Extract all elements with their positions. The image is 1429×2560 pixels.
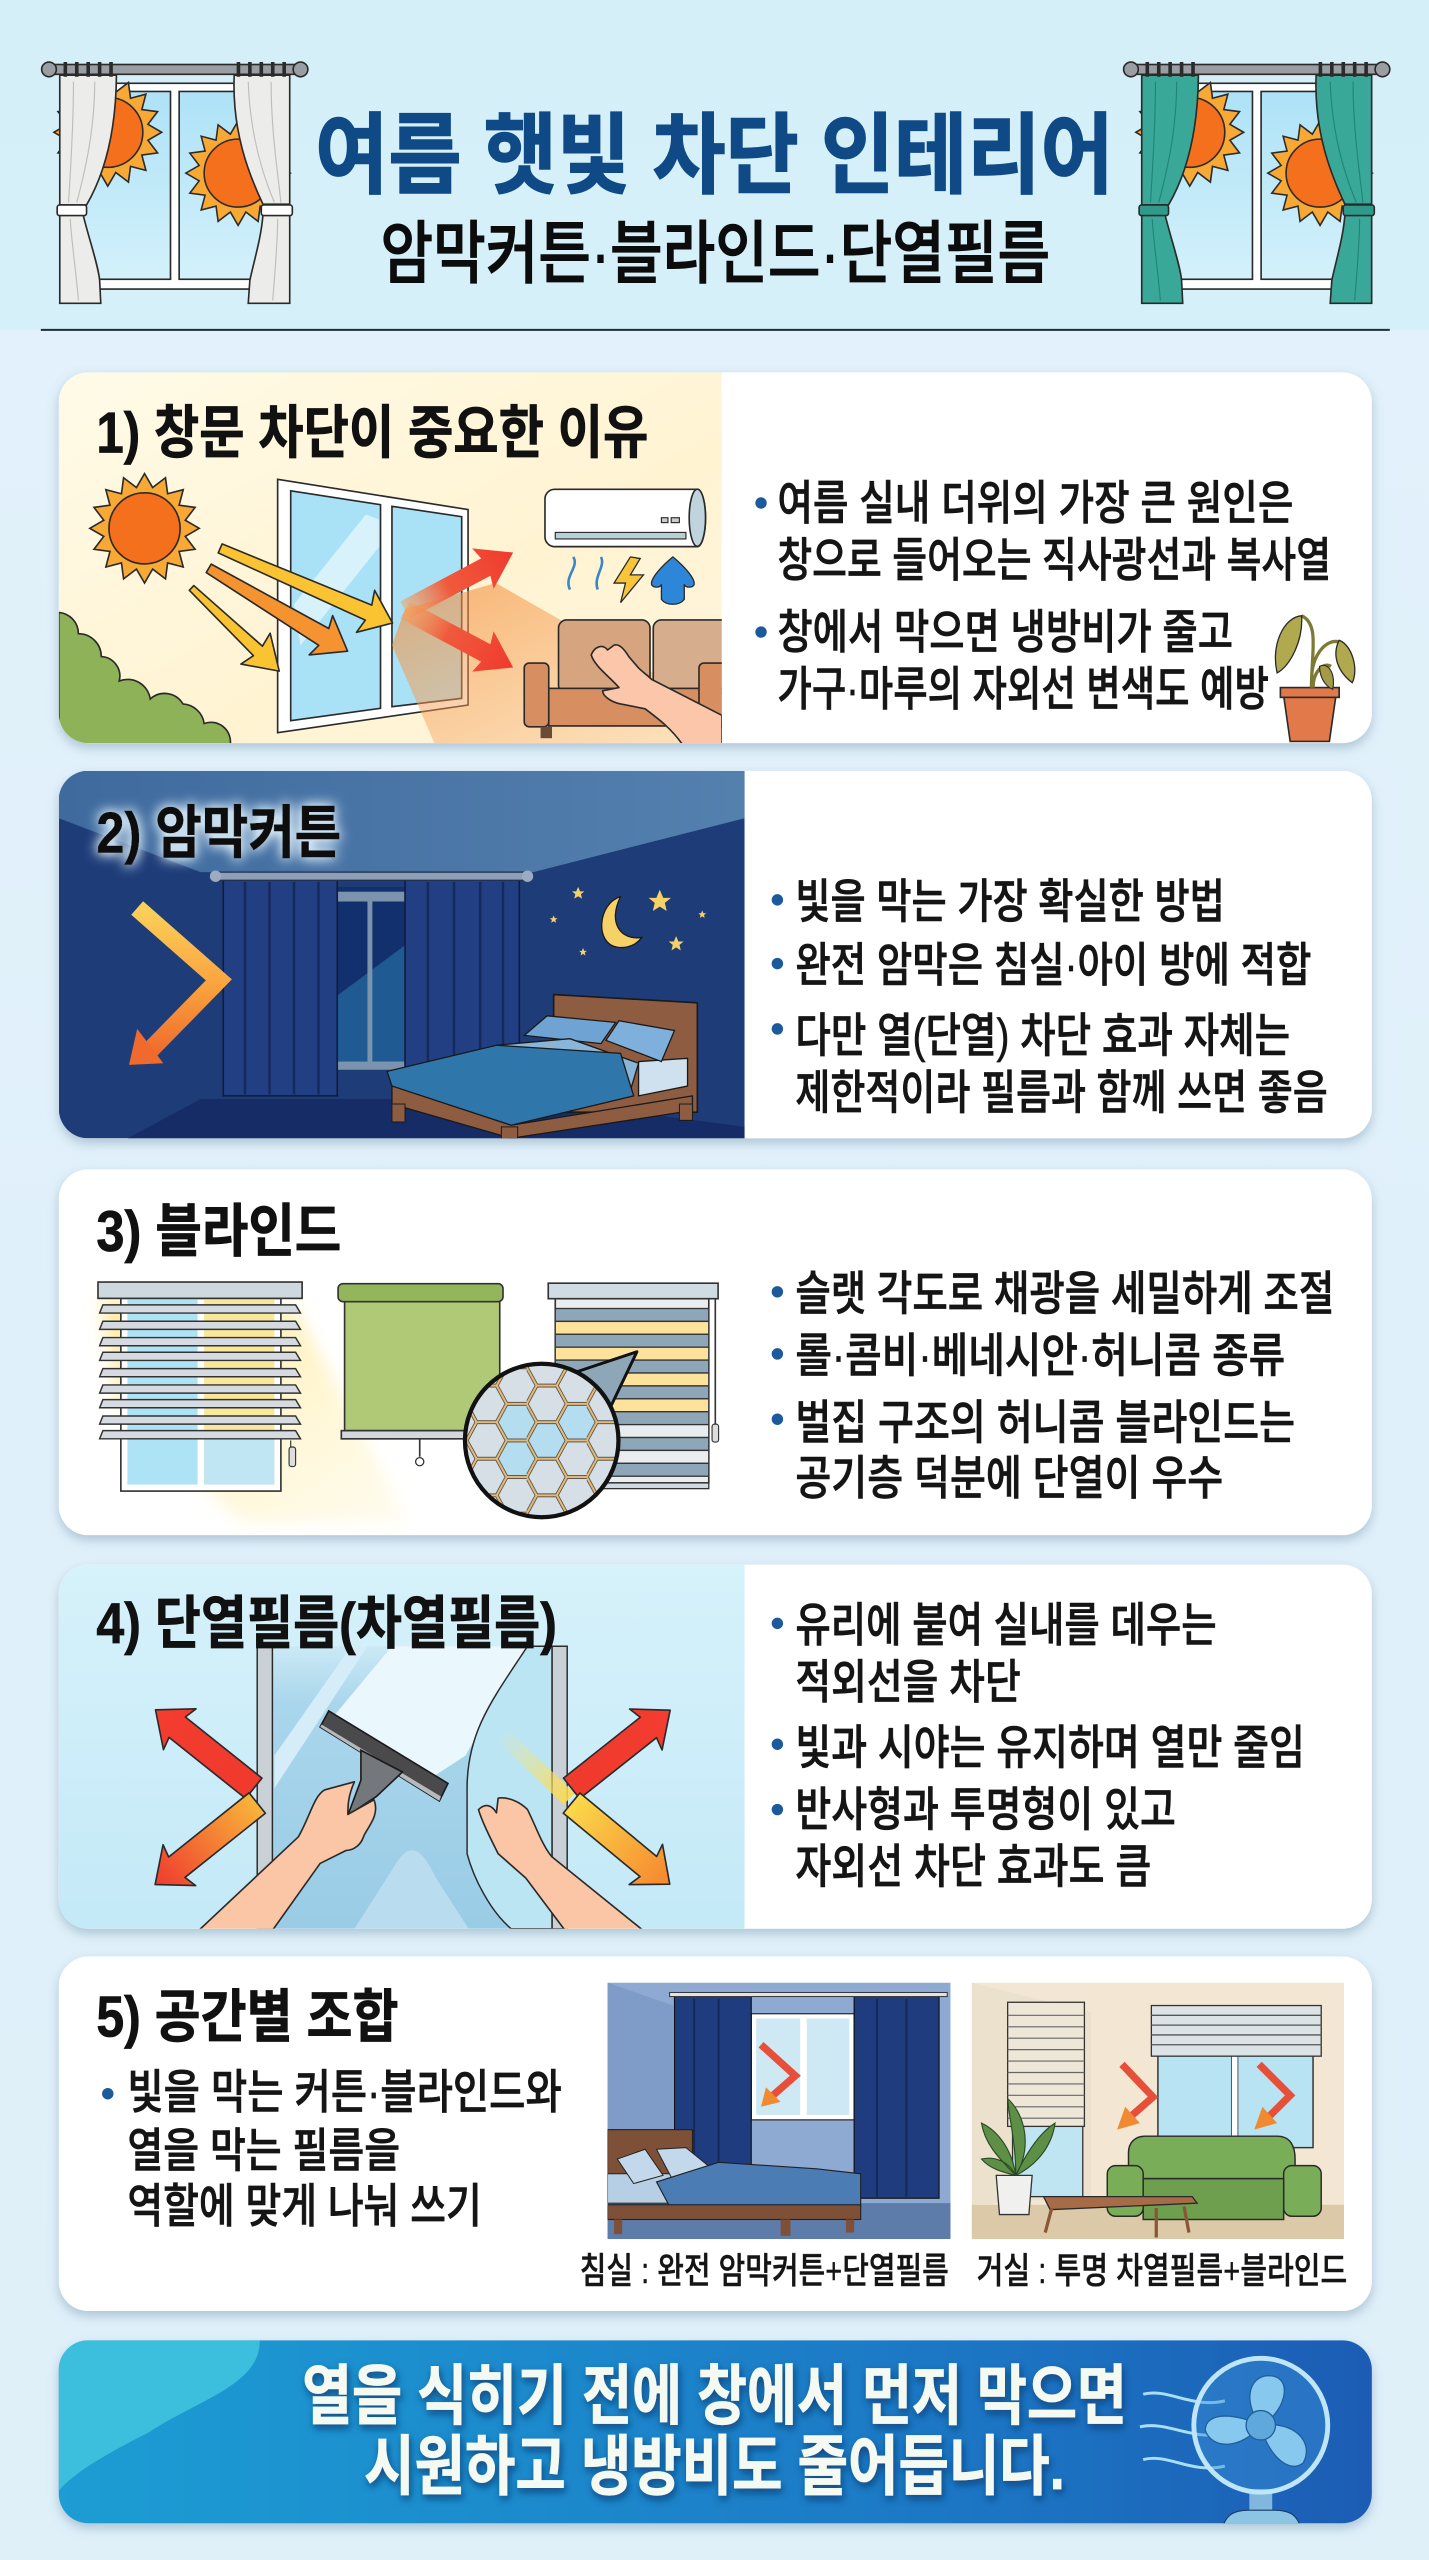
bullet list: 빛을 막는 가장 확실한 방법 [795,876,1225,929]
light beam through blinds [101,1298,408,1522]
bullet list: 자외선 차단 효과도 큼 [795,1841,1151,1894]
heading: 5) 공간별 조합 [96,1986,398,2050]
heading: 1) 창문 차단이 중요한 이유 [96,401,648,465]
bullet list: 빛과 시야는 유지하며 열만 줄임 [795,1722,1305,1775]
caption: bedroom: 침실 : 완전 암막커튼+단열필름 [580,2250,949,2291]
image: living room [972,1983,1344,2239]
icon: venetian blind [98,1282,302,1491]
bullet list: 열을 막는 필름을 [127,2125,400,2178]
illustration: dark bedroom [59,771,745,1142]
bullet list: 롤·콤비·베네시안·허니콤 종류 [795,1330,1285,1383]
banner: closing message [59,2340,1372,2531]
icon: honeycomb magnifier [465,1352,637,1517]
bullet list: 적외선을 차단 [795,1657,1021,1710]
image: bedroom [608,1983,950,2239]
icon: sofa with hand [524,620,738,745]
bullet list: 다만 열(단열) 차단 효과 자체는 [795,1010,1290,1063]
bullet list [772,1599,1305,1894]
bullet list: 공기층 덕분에 단열이 우수 [795,1452,1223,1505]
icon: roller blind [338,1284,503,1466]
caption: living room: 거실 : 투명 차열필름+블라인드 [977,2250,1347,2291]
bullet list [772,876,1328,1120]
bullet list: 벌집 구조의 허니콤 블라인드는 [795,1397,1295,1450]
icon: squeegee and hands [199,1711,643,1930]
bullet list: 가구·마루의 자외선 변색도 예방 [777,664,1269,717]
icon: combi zebra blind [548,1283,719,1489]
bullet list: 반사형과 투명형이 있고 [795,1784,1176,1837]
illustration: sun, window, heat arrows [59,372,738,745]
bullet list [772,1268,1334,1505]
panel: 1) why window shading matters [59,372,1372,745]
banner text [302,2360,1127,2503]
panel: 2) blackout curtains [59,771,1372,1142]
panel: 3) blinds [59,1169,1372,1535]
banner text: 시원하고 냉방비도 줄어듭니다. [364,2430,1065,2503]
bullet list: 유리에 붙여 실내를 데우는 [795,1599,1217,1652]
subtitle: 암막커튼·블라인드·단열필름 [381,216,1050,293]
icon: wall air conditioner [545,489,706,604]
icon: arrow deflected [129,908,219,1065]
heading: 3) 블라인드 [96,1200,341,1264]
icon: wilted potted plant [1275,616,1355,741]
icon: right window with teal curtains and sun [1124,62,1390,303]
bullet list: 여름 실내 더위의 가장 큰 원인은 [777,477,1293,530]
bullet list: 빛을 막는 커튼·블라인드와 [127,2066,562,2119]
illustration: film being applied to glass [59,1565,745,1930]
bullet list: 역할에 맞게 나눠 쓰기 [127,2181,482,2234]
bullet list: 완전 암막은 침실·아이 방에 적합 [795,940,1311,993]
heading: 2) 암막커튼 [96,802,341,866]
panel: 5) combination by room [59,1957,1372,2311]
icon: bed [387,995,697,1142]
banner text: 열을 식히기 전에 창에서 먼저 막으면 [302,2360,1127,2433]
bullet list [755,477,1331,717]
icon: electric fan [1140,2358,1328,2531]
bullet list [102,2066,562,2234]
header band [0,0,1429,330]
title: 여름 햇빛 차단 인테리어 [315,106,1114,205]
heat arrows [154,1708,671,1886]
bullet list: 창에서 막으면 냉방비가 줄고 [777,606,1233,659]
icon: moon and stars [550,887,706,955]
heading: 4) 단열필름(차열필름) [96,1592,557,1656]
icon: left window with white curtains and sun [42,62,308,303]
panel: 4) insulation film [59,1565,1372,1930]
